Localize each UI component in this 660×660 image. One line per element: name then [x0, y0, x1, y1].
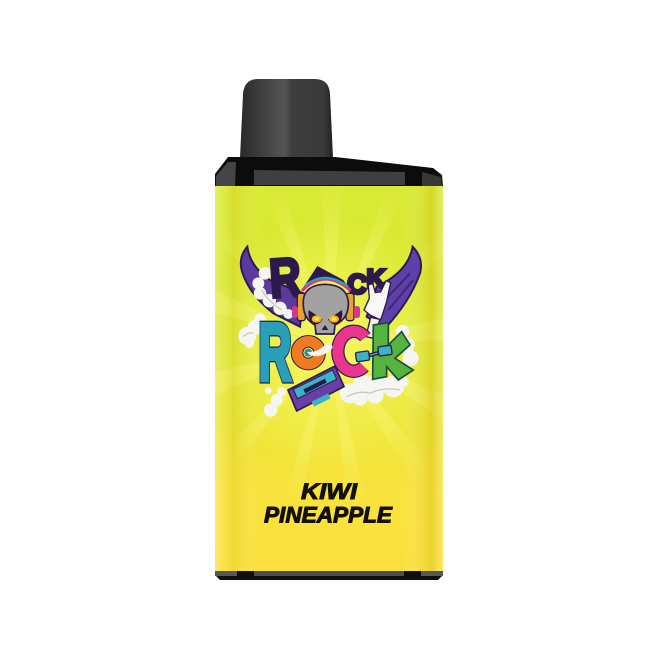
letter R: R — [258, 308, 292, 399]
sunburst rays — [215, 201, 443, 485]
headphone ears — [292, 293, 360, 321]
top lettering: ROCK: C — [345, 267, 369, 301]
rock hand — [364, 281, 391, 338]
flavour label: KIWI PINEAPPLE: KIWI — [301, 479, 358, 504]
headband and hat — [303, 266, 350, 290]
product illustration: vape device — [215, 79, 443, 580]
top lettering: ROCK — [267, 246, 386, 310]
left wing — [241, 247, 303, 327]
skull — [303, 284, 348, 334]
cassette tape — [288, 366, 344, 411]
top lettering: ROCK: R — [267, 246, 303, 310]
Rock Rock logo artwork — [238, 246, 421, 417]
right wing — [367, 247, 421, 328]
wing feather lines — [383, 273, 413, 310]
mouthpiece cap — [240, 79, 333, 158]
smoke shading — [243, 290, 400, 397]
bottom base — [215, 571, 443, 580]
letter R — [258, 308, 292, 399]
smoke through O — [307, 344, 333, 356]
flavour label: KIWI PINEAPPLE — [264, 479, 393, 528]
smoke clouds — [238, 267, 419, 417]
top lettering: ROCK: K — [367, 263, 386, 293]
goggles strap — [355, 345, 392, 362]
letter C — [338, 331, 365, 371]
top collar — [215, 157, 443, 186]
yellow body panel — [215, 186, 443, 571]
letter O — [297, 341, 320, 364]
letter R: R — [258, 308, 292, 399]
letter K — [373, 323, 413, 380]
flavour label: KIWI PINEAPPLE: PINEAPPLE — [264, 502, 393, 528]
